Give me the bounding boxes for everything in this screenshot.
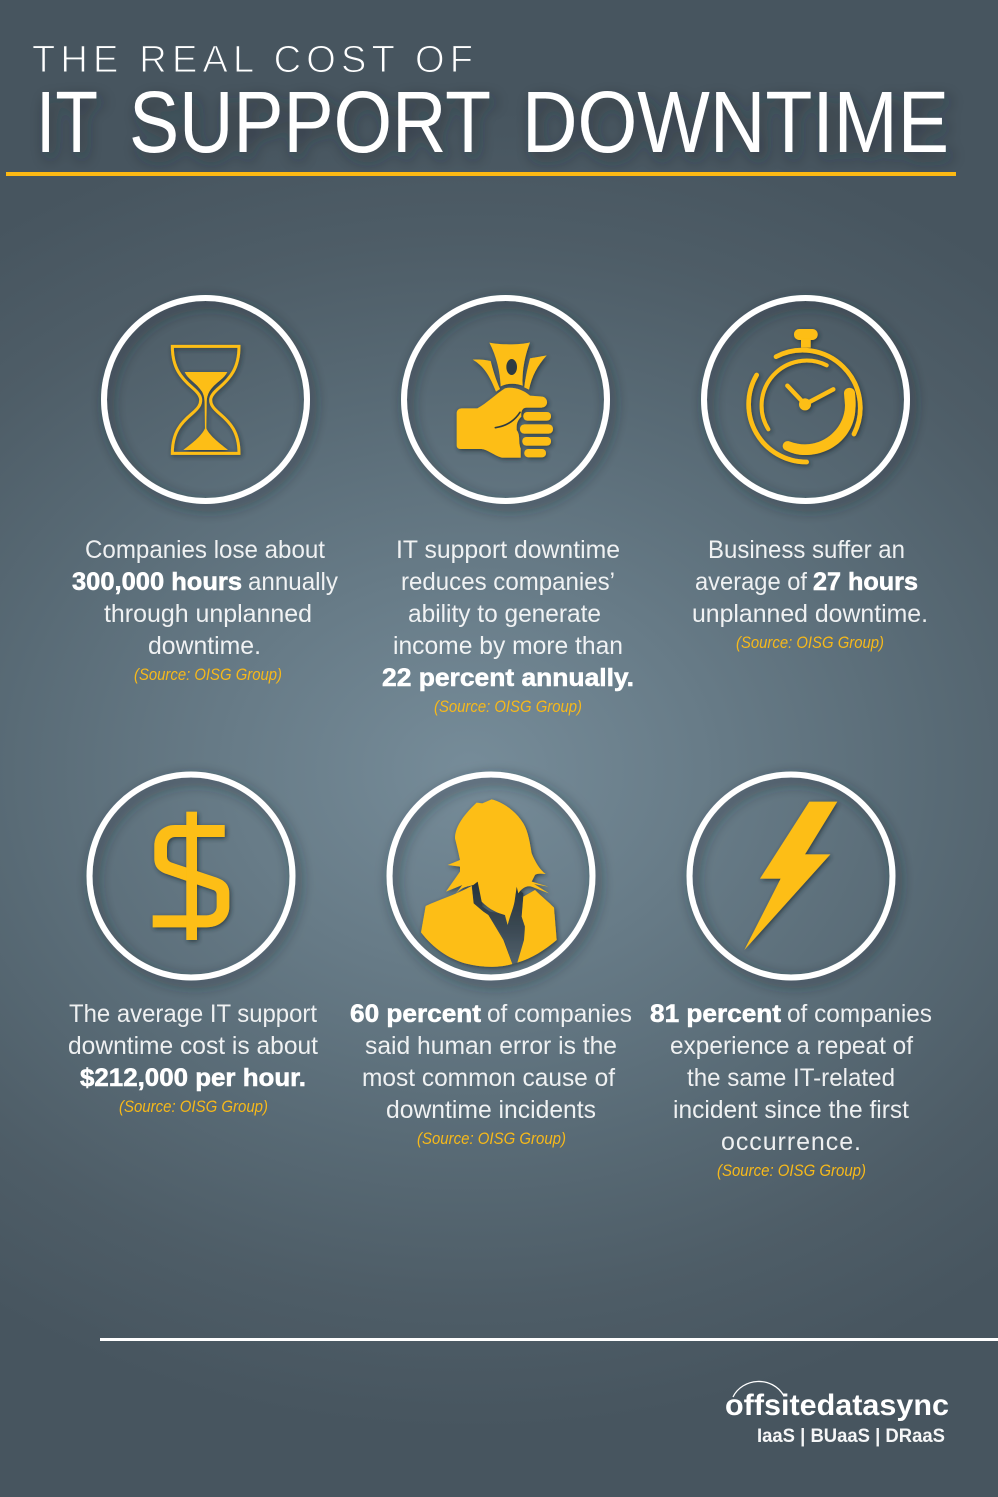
icon: fist holding money: [457, 342, 553, 458]
text: unplanned downtime hours: average of: [695, 568, 807, 596]
logo tagline: IaaS | BUaaS | DRaaS: [757, 1426, 945, 1447]
text: cost per hour: $212,000 per hour.: [80, 1064, 306, 1092]
icon ring: [390, 774, 592, 978]
text: lost hours: 300,000 hours: [72, 568, 242, 596]
text: lost hours: (Source: OISG Group): [134, 665, 282, 684]
title line: the real cost of: THE REAL COST OF: [32, 39, 473, 81]
text: unplanned downtime hours: unplanned downtime.: [692, 600, 928, 628]
icon: lightning bolt: [744, 802, 837, 950]
text: repeat incidents: incident since the first: [673, 1096, 909, 1124]
text: unplanned downtime hours: 27 hours: [813, 568, 918, 596]
logo wordmark: offsitedatasync: [725, 1389, 949, 1422]
text: human error: (Source: OISG Group): [417, 1129, 566, 1148]
icon ring: [90, 774, 292, 978]
text: unplanned downtime hours: [692, 536, 928, 652]
icon ring: [104, 298, 307, 501]
text: human error: said human error is the: [365, 1032, 617, 1060]
text: human error: [350, 1000, 632, 1148]
text: human error: most common cause of: [362, 1064, 615, 1092]
text: cost per hour: (Source: OISG Group): [119, 1097, 268, 1116]
panel: repeat incidents: [650, 774, 932, 1180]
text: lost hours: annually: [248, 568, 338, 596]
panel: lost income: [382, 298, 634, 716]
text: cost per hour: downtime cost is about: [68, 1032, 318, 1060]
text: human error: 60 percent: [350, 1000, 482, 1028]
icon ring: [404, 298, 607, 501]
text: human error: downtime incidents: [386, 1096, 596, 1124]
text: lost hours: [72, 536, 338, 684]
footer rule: [100, 1338, 998, 1341]
text: cost per hour: The average IT support: [69, 1000, 317, 1028]
text: lost hours: downtime.: [148, 632, 261, 660]
text: lost income: reduces companies’: [401, 568, 615, 596]
text: repeat incidents: [650, 1000, 932, 1180]
title line: it support downtime: DOWNTIME: [522, 74, 949, 171]
text: lost income: ability to generate: [408, 600, 601, 628]
icon: person silhouette: [421, 799, 557, 967]
icon: stopwatch: [749, 329, 860, 462]
icon: hourglass: [172, 346, 239, 453]
title line: it support downtime: [36, 74, 949, 171]
panel: unplanned downtime hours: [692, 298, 928, 652]
panel: human error: [350, 774, 632, 1148]
title: [32, 39, 949, 171]
text: lost income: [382, 536, 634, 716]
icon ring: [690, 774, 892, 978]
text: unplanned downtime hours: (Source: OISG Group): [736, 633, 884, 652]
logo: offsitedatasync: [725, 1381, 949, 1447]
panel: lost hours: [72, 298, 338, 684]
text: lost income: IT support downtime: [396, 536, 620, 564]
text: repeat incidents: occurrence.: [721, 1128, 861, 1156]
gold title rule: [6, 172, 956, 176]
text: lost hours: through unplanned: [104, 600, 312, 628]
text: lost hours: Companies lose about: [85, 536, 325, 564]
icon: dollar sign: [153, 812, 229, 940]
text: human error: of companies: [487, 1000, 632, 1028]
text: lost income: income by more than: [393, 632, 623, 660]
text: repeat incidents: (Source: OISG Group): [717, 1161, 866, 1180]
text: repeat incidents: of companies: [787, 1000, 932, 1028]
panel: cost per hour: [68, 774, 318, 1116]
logo arc: [733, 1381, 784, 1397]
text: repeat incidents: the same IT-related: [687, 1064, 895, 1092]
text: repeat incidents: 81 percent: [650, 1000, 782, 1028]
text: cost per hour: [68, 1000, 318, 1116]
text: lost income: (Source: OISG Group): [434, 697, 582, 716]
title line: it support downtime: SUPPORT: [129, 74, 491, 171]
icon ring: [704, 298, 907, 501]
text: lost income: 22 percent annually.: [382, 664, 634, 692]
title line: it support downtime: IT: [36, 74, 98, 171]
text: unplanned downtime hours: Business suffer an: [708, 536, 905, 564]
text: repeat incidents: experience a repeat of: [670, 1032, 913, 1060]
